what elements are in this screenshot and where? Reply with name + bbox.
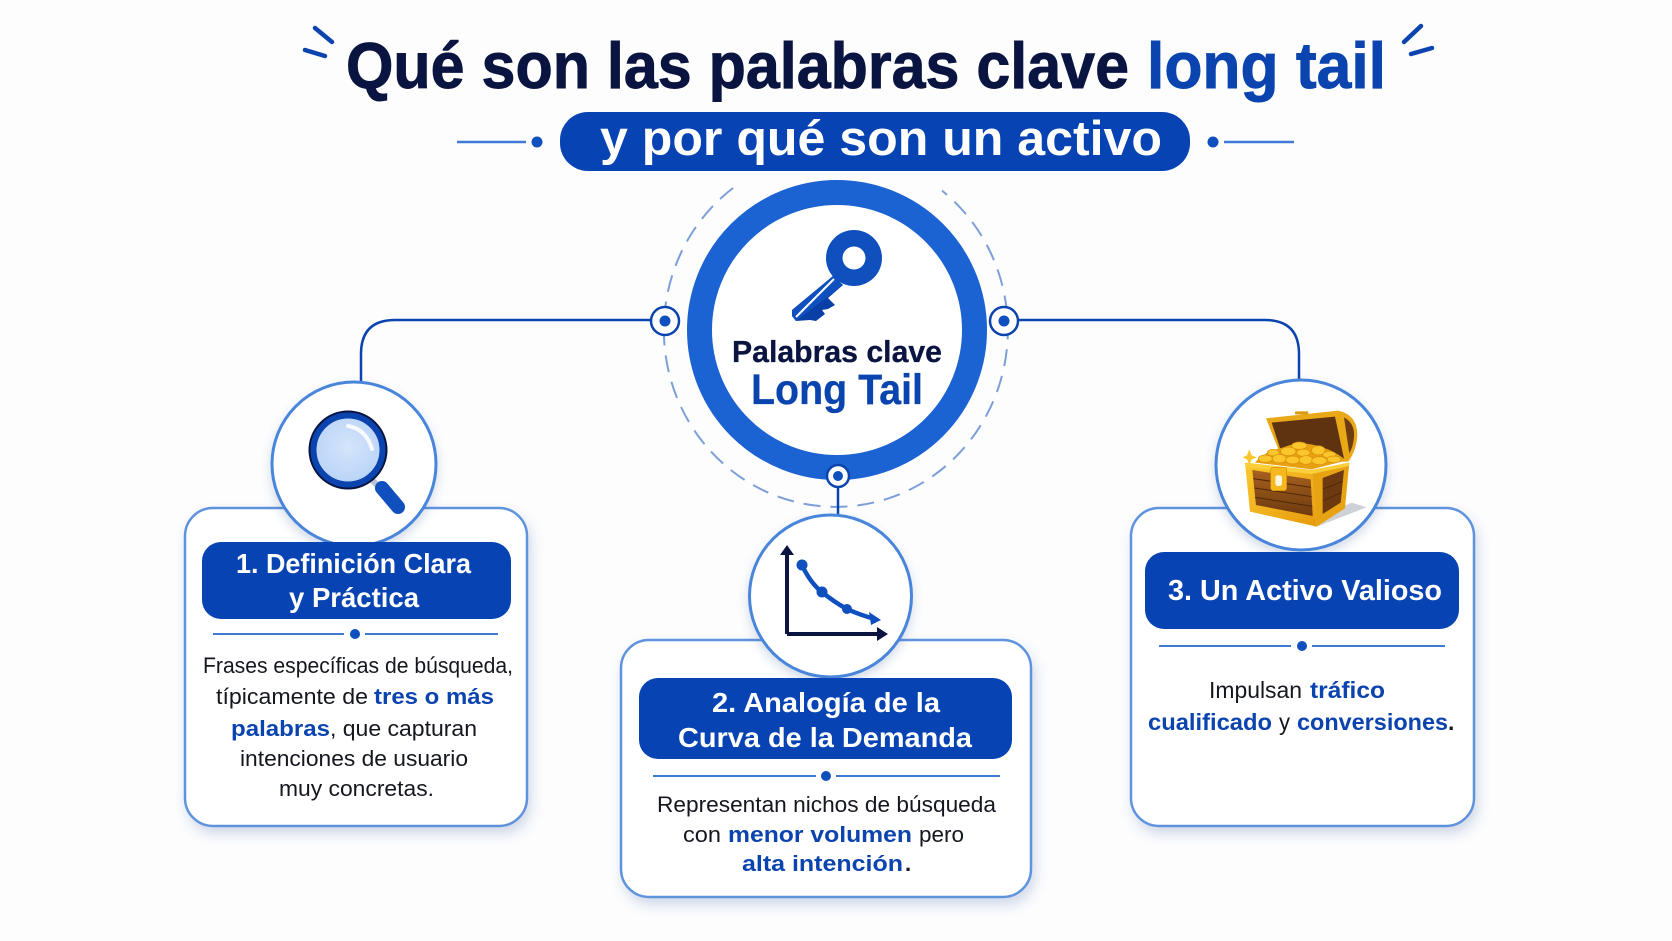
- card 2 text: [657, 792, 997, 876]
- card 3 text: cualificado: [1148, 709, 1272, 735]
- card 1 heading: 1. Definición Clara: [236, 548, 471, 579]
- subtitle left ornament: [457, 136, 542, 148]
- card 2 heading: Curva de la Demanda: [678, 722, 972, 753]
- icon: left title sparks: [305, 28, 332, 56]
- card 1 text: tres o más: [374, 684, 494, 709]
- card 3 text: tráfico: [1310, 677, 1385, 703]
- card 1 heading: y Práctica: [289, 582, 419, 613]
- icon circle: magnifier: [272, 382, 436, 546]
- subtitle right ornament: [1208, 136, 1294, 148]
- card 2 text: Representan nichos de búsqueda: [657, 792, 997, 817]
- central hub: [700, 192, 974, 468]
- hub label: Long Tail: [751, 366, 923, 414]
- subtitle pill: y por qué son un activo: [600, 112, 1162, 166]
- node: left: [651, 307, 679, 335]
- panel: card 1 definition: [185, 382, 527, 826]
- card 2 text: pero: [919, 822, 964, 847]
- card 3 text: Impulsan: [1209, 677, 1302, 703]
- card 1 divider: [213, 629, 498, 639]
- hub label: [732, 334, 942, 414]
- card 1 text: Frases específicas de búsqueda,: [203, 653, 513, 678]
- card 2 divider: [653, 771, 1000, 781]
- connector: hub to card 2: [837, 486, 839, 515]
- card 3 text: y: [1279, 709, 1290, 735]
- card 3 text: conversiones: [1297, 709, 1448, 735]
- card 2 text: con: [683, 822, 721, 847]
- panel: card 2 analogy: [621, 515, 1031, 897]
- card 1 text: muy concretas.: [279, 776, 434, 801]
- panel: card 3 valuable asset: [1131, 380, 1474, 826]
- card 3 heading: 3. Un Activo Valioso: [1168, 575, 1442, 607]
- card 1 text: , que capturan: [330, 716, 477, 741]
- node: bottom: [827, 465, 849, 487]
- card 2 text: alta intención: [742, 851, 903, 876]
- node: right: [990, 307, 1018, 335]
- card 2 heading: 2. Analogía de la: [712, 687, 940, 718]
- card 3 text: [1148, 677, 1454, 735]
- hub label: Palabras clave: [732, 334, 942, 369]
- title: long tail: [1147, 29, 1386, 102]
- icon circle: demand curve chart: [750, 515, 912, 677]
- connector: hub to card 3: [1018, 320, 1299, 380]
- dashed orbit around hub: [664, 188, 1008, 507]
- card 3 heading: [1145, 552, 1459, 629]
- card 1 text: intenciones de usuario: [240, 746, 468, 771]
- connector: hub to card 1: [361, 320, 651, 382]
- card 1 heading: [202, 542, 511, 619]
- card 2 text: menor volumen: [728, 822, 912, 847]
- card 3 divider: [1159, 641, 1445, 651]
- icon: key: [792, 230, 882, 321]
- card 2 heading: [639, 678, 1012, 759]
- card 1 text: palabras: [231, 716, 330, 741]
- icon circle: treasure chest: [1216, 380, 1386, 550]
- card 1 text: [203, 653, 513, 801]
- title: Qué son las palabras clave: [346, 29, 1129, 102]
- card 2 text: .: [905, 851, 911, 876]
- icon: right title sparks: [1404, 26, 1432, 54]
- hub ring: [700, 192, 974, 468]
- card 3 text: .: [1448, 709, 1454, 735]
- card 1 text: típicamente de: [216, 684, 368, 709]
